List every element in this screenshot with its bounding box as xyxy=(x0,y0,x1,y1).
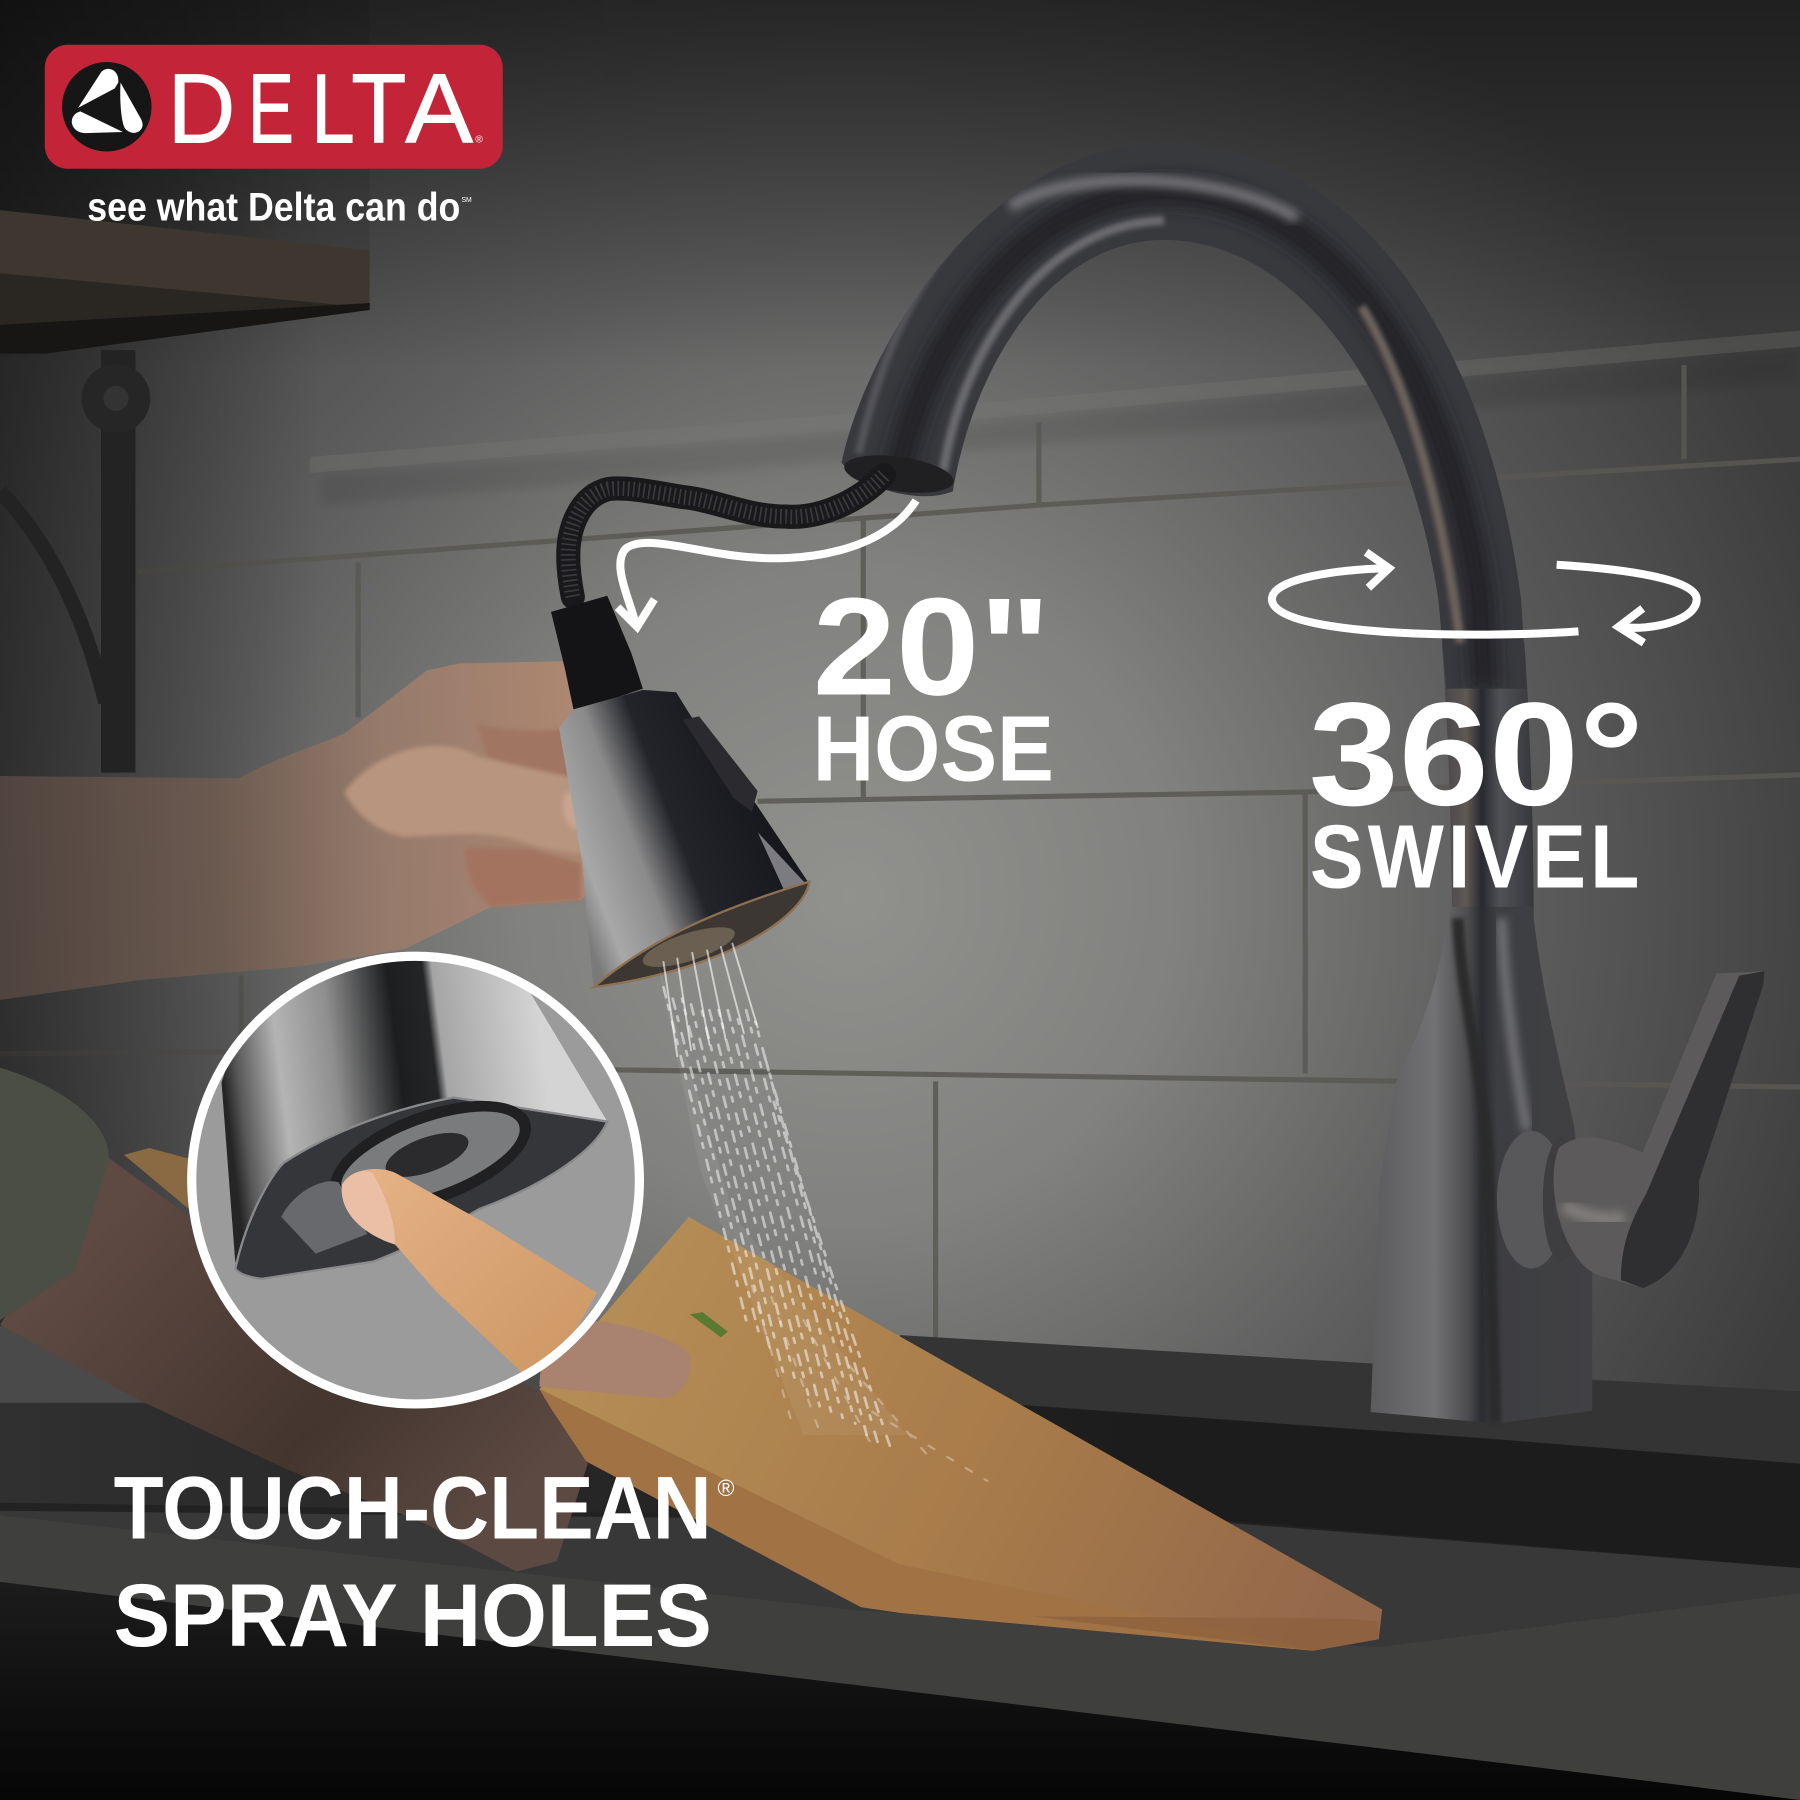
logo wordmark: D xyxy=(168,53,235,163)
sprayer body xyxy=(559,690,809,987)
sprayer close-up xyxy=(222,953,607,1263)
thumb xyxy=(344,746,633,853)
herb on board xyxy=(690,1312,728,1337)
speckled counter edge xyxy=(0,1403,1800,1568)
faucet handle xyxy=(1497,971,1764,1288)
sprayer button xyxy=(683,716,758,812)
label: 360 swivel xyxy=(1309,673,1644,907)
Delta logo xyxy=(45,45,503,169)
Delta logo: ® xyxy=(475,134,483,145)
tagline: SM xyxy=(461,197,472,204)
nozzle ring xyxy=(330,1100,531,1200)
fingers shadow xyxy=(476,723,580,781)
background: tiled kitchen wall xyxy=(0,0,1800,1435)
grout lines xyxy=(0,365,1800,1337)
front shadow xyxy=(0,1582,1800,1800)
logo wordmark: E xyxy=(248,53,294,163)
logo emblem xyxy=(62,62,152,152)
logo wordmark: T xyxy=(351,53,406,163)
label: touch-clean spray holes: SPRAY HOLES xyxy=(114,1565,712,1665)
sink interior xyxy=(0,1511,1800,1800)
cutting board xyxy=(124,1148,1382,1651)
icon: 360 degree swivel arrows xyxy=(1272,552,1697,643)
faucet xyxy=(827,126,1764,1423)
label: touch-clean spray holes: TOUCH-CLEAN xyxy=(114,1457,712,1557)
lower arm and sleeve xyxy=(0,1068,691,1572)
faucet spout xyxy=(842,166,1524,689)
label: touch-clean spray holes xyxy=(114,1457,734,1665)
wooden shelf with bracket xyxy=(0,210,370,773)
upper hand holding sprayer xyxy=(0,661,634,1000)
spout opening xyxy=(842,449,956,499)
water spray xyxy=(657,944,987,1481)
faucet base xyxy=(1371,907,1592,1423)
cabinet moulding xyxy=(310,331,1800,473)
label: 20 inch hose xyxy=(813,570,1054,801)
logo wordmark: L xyxy=(311,53,355,163)
tagline: see what Delta can do xyxy=(87,184,460,229)
counter surface xyxy=(900,1335,1800,1481)
thumb on board xyxy=(540,1320,691,1398)
label: 20 inch hose: 20" xyxy=(813,570,1050,725)
label: 20 inch hose: HOSE xyxy=(813,697,1054,801)
board front edge xyxy=(540,1389,1313,1651)
logo wordmark: A xyxy=(405,53,473,163)
pull-down hose xyxy=(568,475,884,597)
label: 360 swivel: SWIVEL xyxy=(1310,807,1644,907)
faucet neck xyxy=(1442,643,1534,918)
black connector xyxy=(551,596,643,712)
label: 360 swivel: 360° xyxy=(1309,673,1644,837)
sprayer face xyxy=(593,882,809,987)
spray head xyxy=(551,596,809,987)
sink rim xyxy=(0,1515,1800,1800)
countertop and sink xyxy=(0,1326,1800,1800)
logo wordmark xyxy=(168,53,473,163)
label: touch-clean spray holes: ® xyxy=(717,1475,734,1501)
arrow: hose length xyxy=(618,501,916,627)
inset circle: touch-clean spray face xyxy=(192,953,639,1404)
finger pressing xyxy=(342,1169,597,1395)
